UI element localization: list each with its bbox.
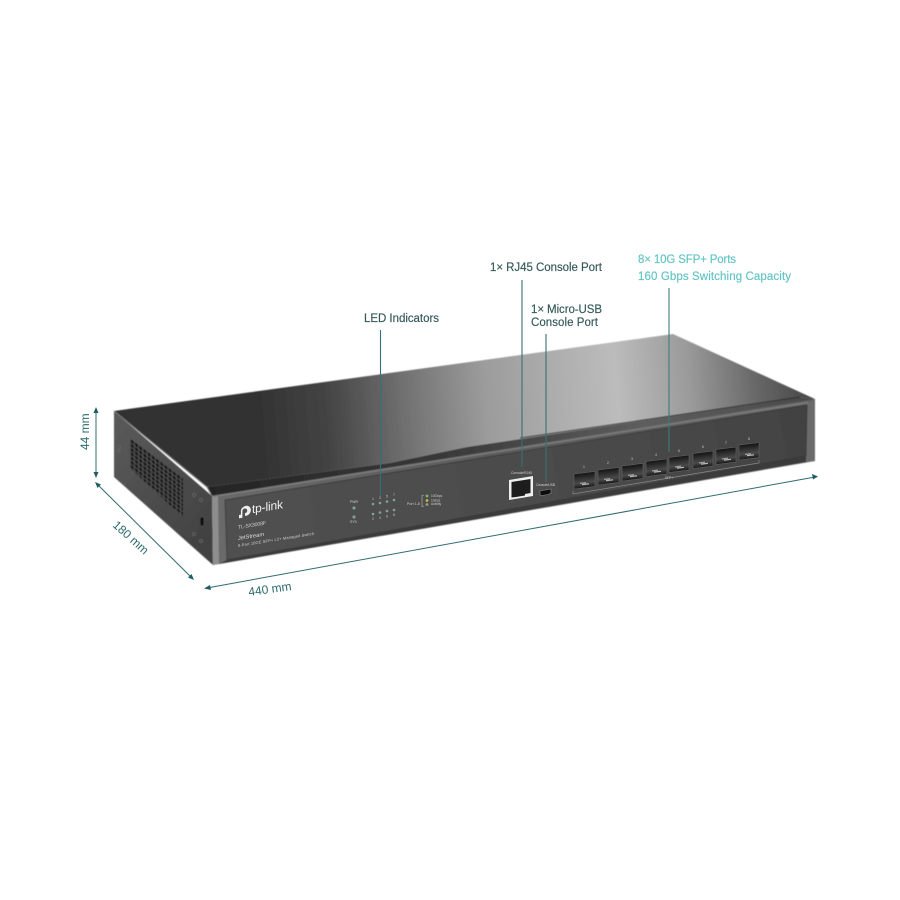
port LED grid: 7: [393, 493, 395, 497]
system LEDs: SYS: [350, 520, 358, 524]
leader line: RJ45 console port: [521, 280, 523, 467]
port numbers: 1: [583, 465, 585, 469]
port numbers: 8: [748, 437, 750, 441]
tp-link logo: [239, 497, 284, 518]
port LED grid: [372, 493, 395, 521]
label: LED indicators: LED Indicators: [364, 313, 439, 325]
dimension: height arrow: [94, 407, 98, 478]
logo icon: [239, 505, 251, 518]
front panel: [225, 405, 807, 560]
label: micro-USB console port: Console Port: [531, 317, 599, 329]
LED legend: Activity: [431, 502, 442, 506]
product description: 8-Port 10GE SFP+ L2+ Managed Switch: [238, 531, 314, 548]
port LED grid: 1: [372, 497, 374, 501]
RJ45 console port: [509, 471, 533, 500]
port numbers: 2: [607, 461, 609, 465]
dimension: depth arrow: [95, 482, 194, 580]
label: SFP+ ports: 8× 10G SFP+ Ports: [638, 254, 736, 266]
label: SFP+ ports: [638, 254, 791, 283]
side ventilation: [130, 438, 183, 517]
LED legend: [407, 494, 443, 506]
port LED grid: 4: [379, 516, 381, 520]
dimension: width label: 440 mm: [247, 579, 292, 599]
lid front edge: [207, 397, 815, 496]
SFP+ ports: [573, 437, 759, 494]
model name: TL-SX3008F: [238, 521, 266, 531]
dimension: height label: 44 mm: [78, 413, 92, 450]
bright top strip: [213, 402, 808, 496]
LED legend: 10Gbps: [431, 494, 443, 498]
system LEDs: [350, 500, 358, 524]
port numbers: 4: [655, 453, 657, 457]
label: SFP+ ports: 160 Gbps Switching Capacity: [638, 271, 791, 283]
LED legend: 1Gbps: [431, 498, 441, 502]
label: micro-USB console port: 1× Micro-USB: [531, 304, 602, 316]
leader line: micro-USB console port: [545, 334, 547, 482]
label: micro-USB console port: [531, 304, 602, 329]
logo wordmark: tp-link: [252, 497, 284, 516]
top cover: [114, 334, 815, 487]
LED legend: Port 1-8: [407, 502, 420, 506]
SFP+ ports: SFP+: [665, 476, 673, 480]
system LEDs: PWR: [350, 500, 358, 504]
network switch device: [114, 334, 815, 565]
dimension: width arrow: [204, 474, 818, 590]
leader line: SFP+ ports: [668, 288, 670, 452]
micro-USB console port: [536, 483, 556, 496]
side screws: [118, 446, 204, 542]
port numbers: 7: [725, 441, 727, 445]
port LED grid: 2: [372, 517, 374, 521]
port numbers: [583, 437, 750, 469]
port numbers: 3: [631, 457, 633, 461]
JetStream brand: JetStream: [238, 532, 264, 542]
port LED grid: 3: [379, 496, 381, 500]
port LED grid: 8: [393, 513, 395, 517]
micro-USB console port: Console/USB: [536, 483, 556, 487]
front face bezel: [212, 399, 815, 565]
port numbers: 6: [702, 445, 704, 449]
port numbers: 5: [678, 449, 680, 453]
SFP+ bracket: [573, 460, 759, 494]
port LED grid: 6: [386, 514, 388, 518]
leader line: LED indicators: [380, 330, 382, 496]
label: RJ45 console port: 1× RJ45 Console Port: [490, 262, 603, 274]
RJ45 console port: Console/RJ45: [511, 471, 532, 475]
dimension: depth label: 180 mm: [110, 518, 152, 557]
side face: [114, 411, 213, 565]
port LED grid: 5: [386, 494, 388, 498]
